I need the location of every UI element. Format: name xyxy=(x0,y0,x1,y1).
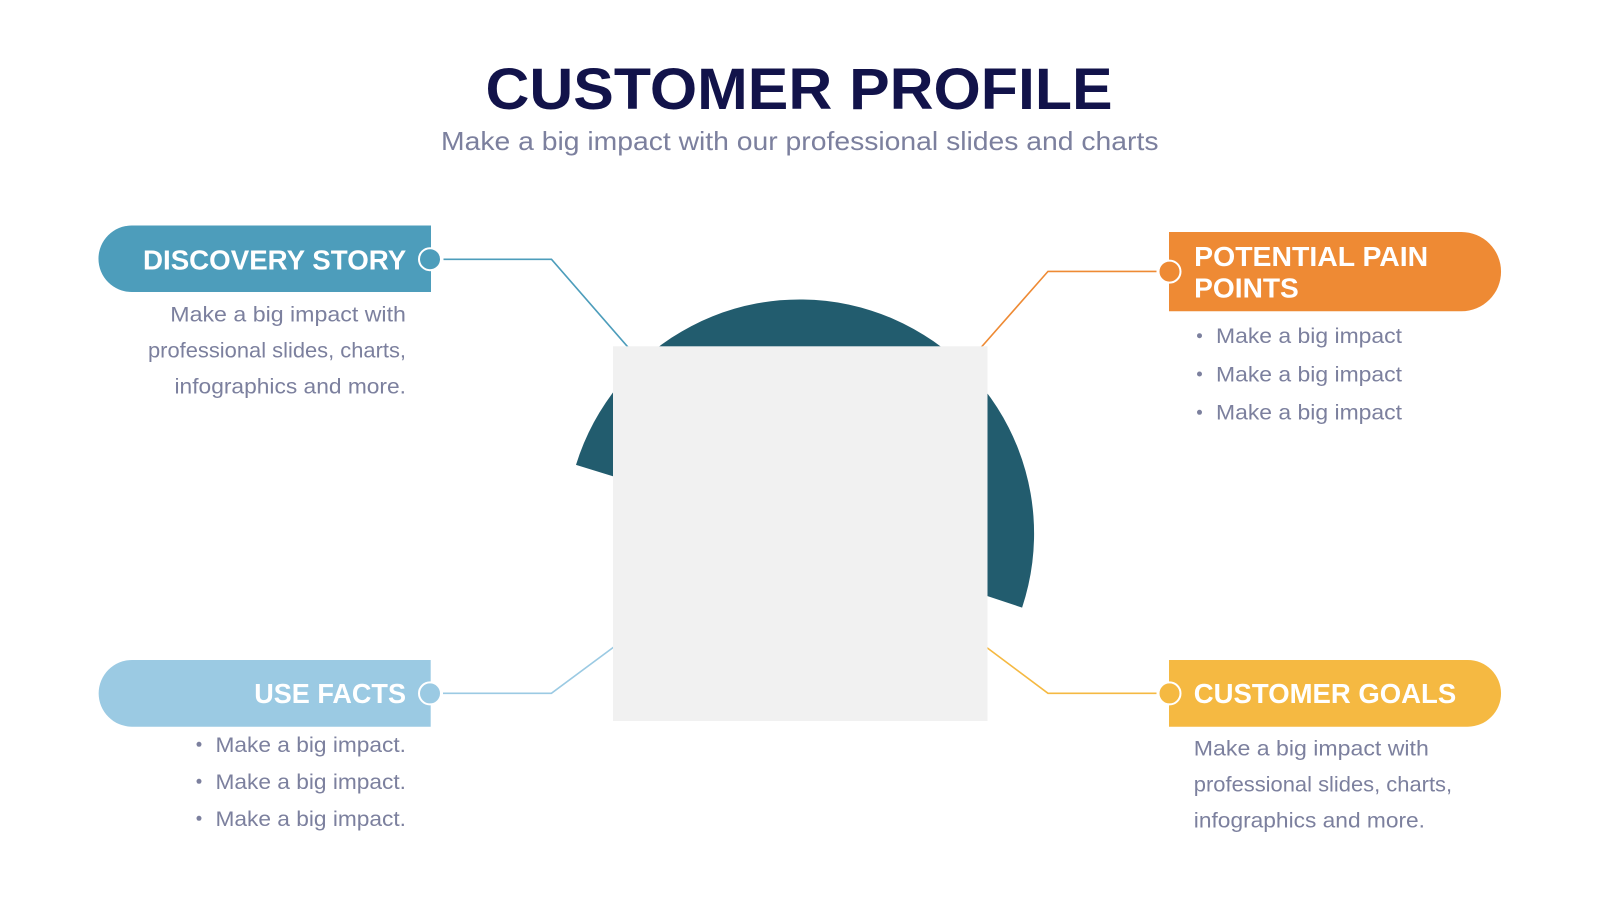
discovery story text xyxy=(148,303,406,398)
discovery story text: professional slides, charts, xyxy=(148,339,406,362)
connector: discovery story xyxy=(444,259,640,361)
panel: customer goals xyxy=(1158,660,1501,832)
discovery story text: infographics and more. xyxy=(174,375,406,398)
potential pain points banner xyxy=(1169,232,1501,311)
potential pain points heading xyxy=(1194,241,1428,304)
connector: potential pain points xyxy=(970,271,1156,360)
potential pain points heading: POTENTIAL PAIN xyxy=(1194,241,1428,272)
title: CUSTOMER PROFILE xyxy=(486,57,1112,122)
central image placeholder xyxy=(613,346,988,721)
customer goals node xyxy=(1158,682,1180,704)
discovery story text: Make a big impact with xyxy=(170,303,406,326)
subtitle: Make a big impact with our professional slides and charts xyxy=(441,126,1158,156)
panel: use facts xyxy=(99,660,441,831)
customer goals banner xyxy=(1169,660,1501,727)
customer goals text: professional slides, charts, xyxy=(1194,773,1452,796)
panel: discovery story xyxy=(98,226,441,398)
use facts bullets xyxy=(196,734,406,831)
use facts banner xyxy=(99,660,431,727)
discovery story heading: DISCOVERY STORY xyxy=(143,244,406,275)
potential pain points bullets: Make a big impact xyxy=(1216,325,1402,348)
central pie wedge xyxy=(576,299,1034,608)
connector: use facts xyxy=(443,635,630,693)
panel: potential pain points xyxy=(1158,232,1501,425)
customer goals text xyxy=(1194,737,1452,832)
connector: customer goals xyxy=(970,635,1156,693)
potential pain points bullets: Make a big impact xyxy=(1216,402,1402,425)
discovery story banner xyxy=(98,226,431,292)
use facts bullets: Make a big impact. xyxy=(216,734,406,757)
customer goals text: infographics and more. xyxy=(1194,809,1425,832)
discovery story node xyxy=(419,248,441,270)
customer goals text: Make a big impact with xyxy=(1194,737,1429,760)
use facts node xyxy=(419,682,441,704)
potential pain points bullets: Make a big impact xyxy=(1216,363,1402,386)
potential pain points node xyxy=(1158,261,1180,283)
customer goals heading: CUSTOMER GOALS xyxy=(1194,678,1456,709)
potential pain points bullets xyxy=(1197,325,1402,425)
use facts heading: USE FACTS xyxy=(254,678,406,709)
potential pain points heading: POINTS xyxy=(1194,272,1299,304)
use facts bullets: Make a big impact. xyxy=(216,771,406,794)
use facts bullets: Make a big impact. xyxy=(216,808,406,831)
